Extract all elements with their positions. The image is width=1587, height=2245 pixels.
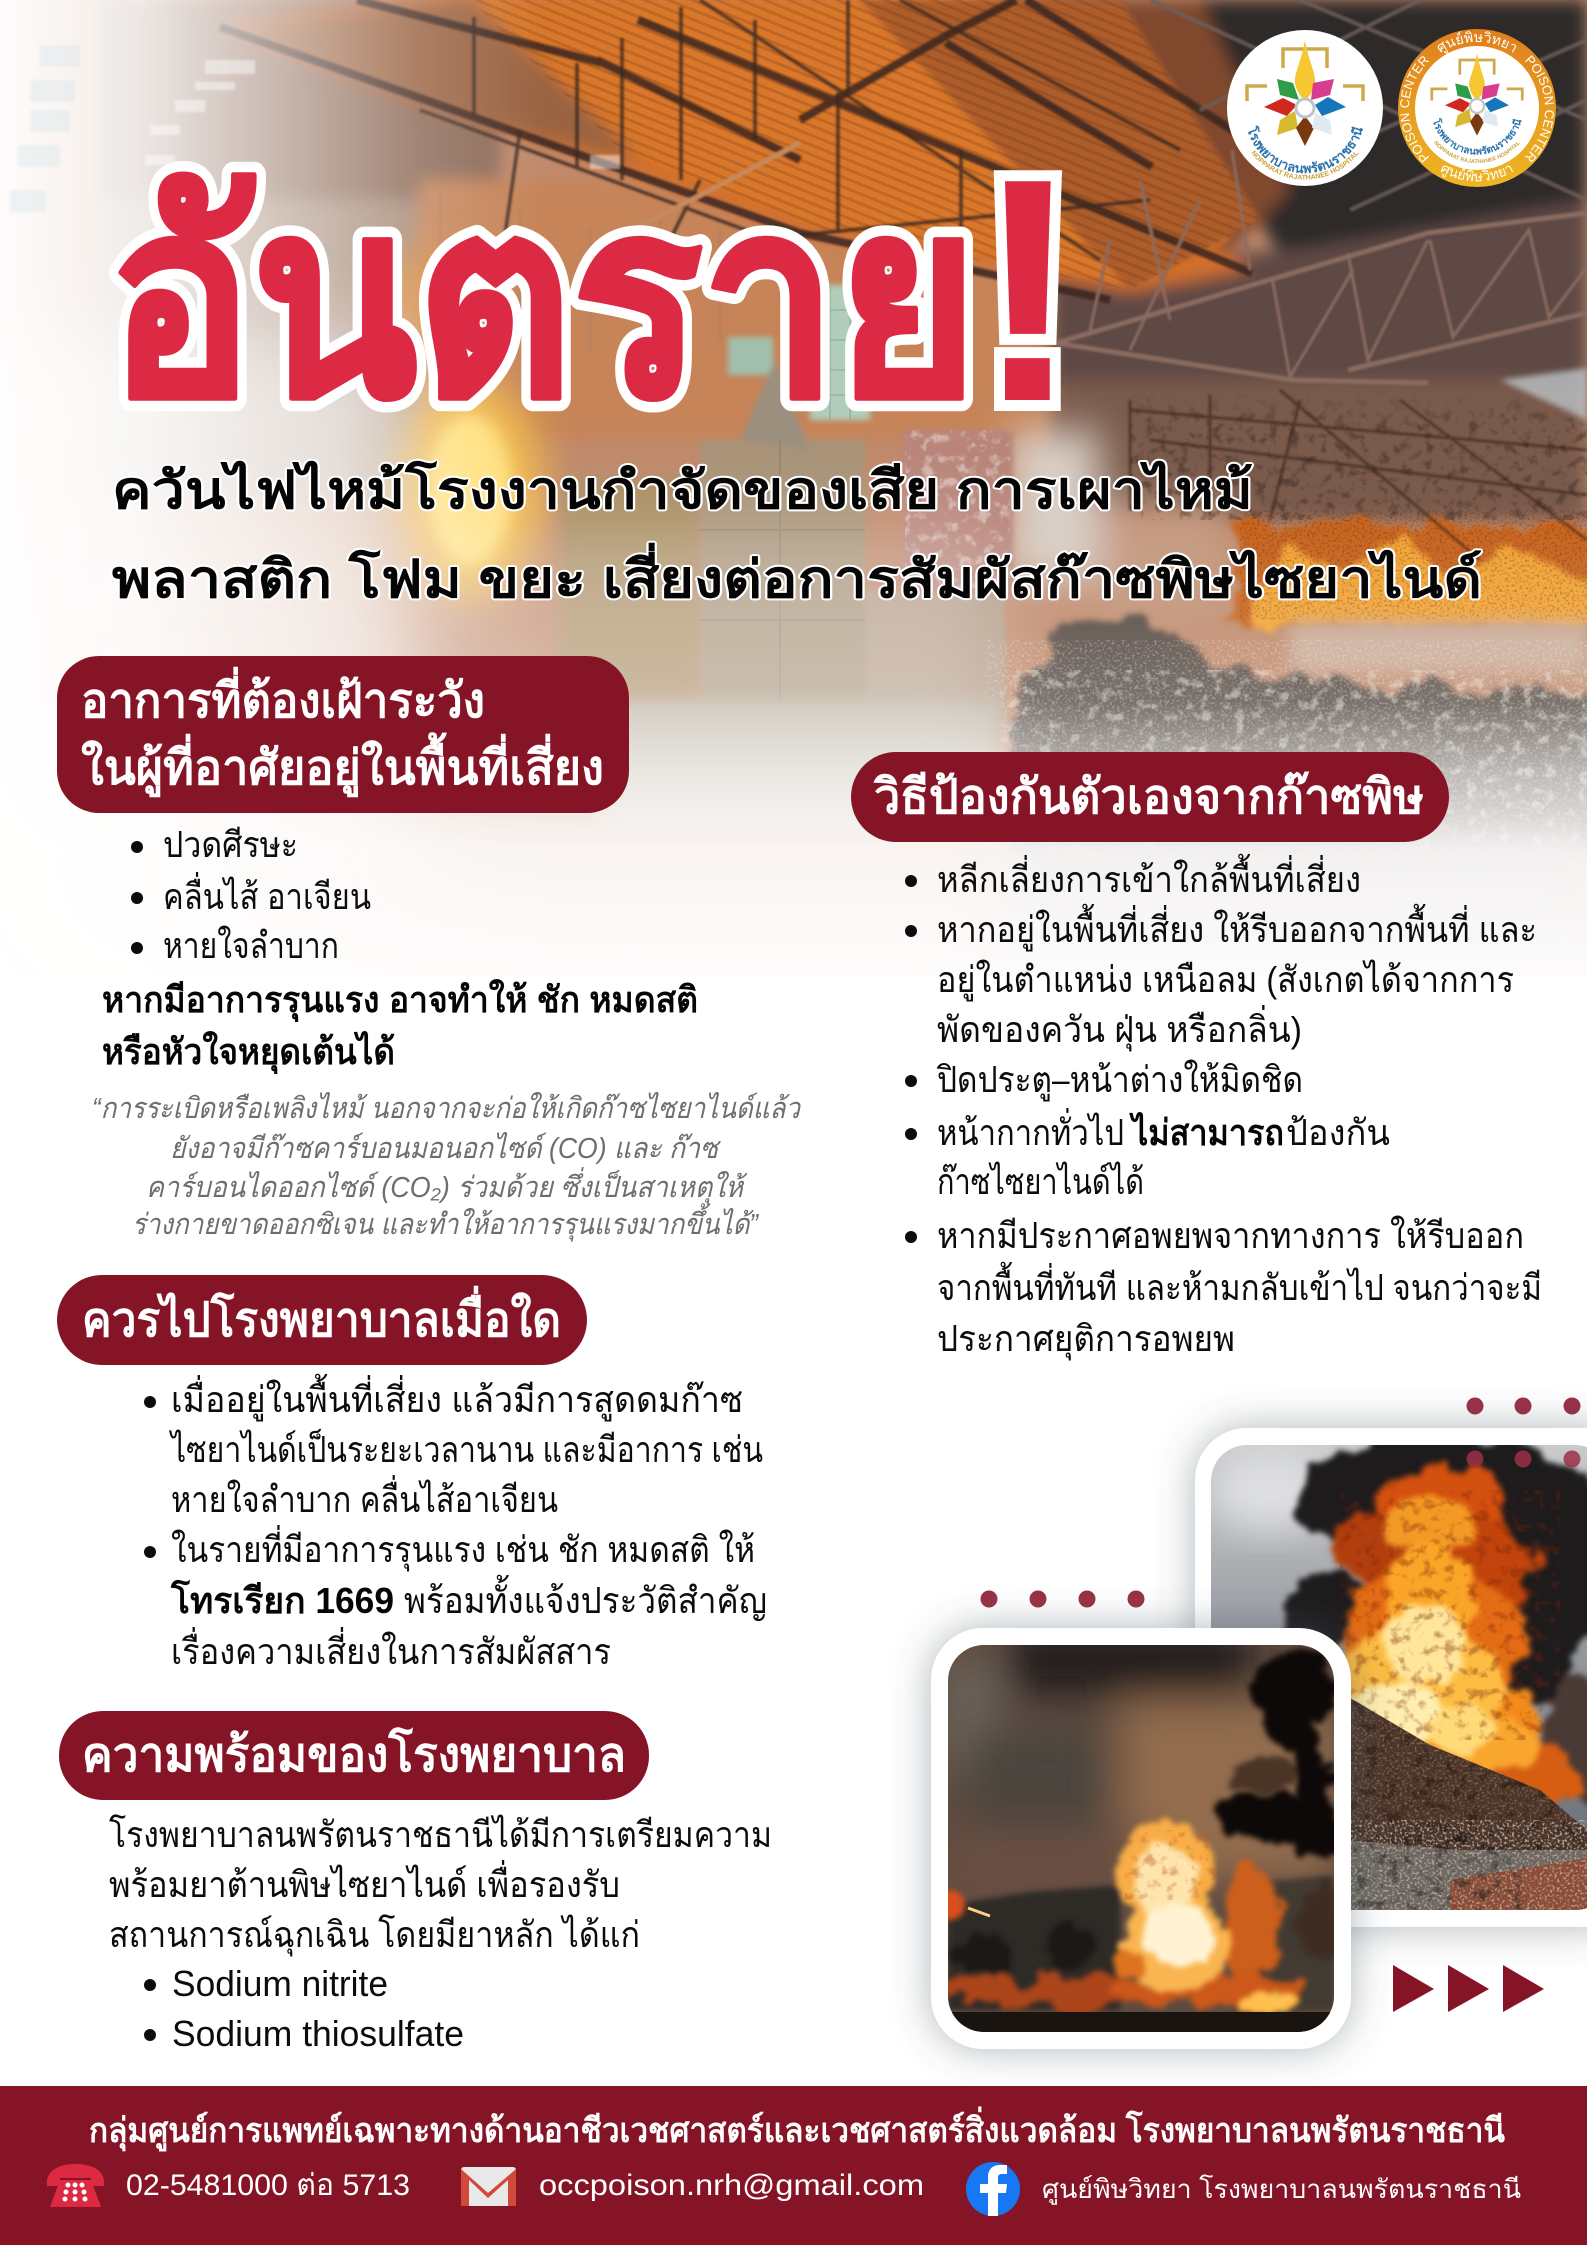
list: when to go: โทรเรียก 1669 — [170, 1579, 394, 1621]
symptom list: หายใจลำบาก — [163, 925, 339, 966]
logo: Poison Center: โรงพยาบาลนพรัตนราชธานี — [1433, 118, 1522, 155]
icon: facebook — [966, 2162, 1020, 2216]
icon: telephone — [47, 2164, 104, 2207]
list: self protection: ก๊าซไซยาไนด์ได้ — [937, 1161, 1144, 1202]
quote: คาร์บอนไดออกไซด์ (CO₂) ร่วมด้วย ซึ่งเป็นสาเหตุให้ — [146, 1167, 748, 1205]
logo: Poison Center: POISON CENTER — [1400, 56, 1430, 163]
list: self protection: ป้องกัน — [1286, 1112, 1390, 1153]
logo: Poison Center: POISON CENTER — [1524, 55, 1554, 162]
subtitle — [112, 459, 1482, 609]
footer heading: กลุ่มศูนย์การแพทย์เฉพาะทางด้านอาชีวเวชศาสตร์และเวชศาสตร์สิ่งแวดล้อม โรงพยาบาลนพรัตนราชธานี — [89, 2106, 1505, 2152]
photo card: burning landfill — [1195, 1428, 1587, 1927]
quote — [92, 1091, 802, 1242]
list: self protection: พัดของควัน ฝุ่น หรือกลิ่น) — [937, 1005, 1302, 1052]
logo: Poison Center: ศูนย์พิษวิทยา — [1440, 166, 1514, 182]
list: when to go: ไซยาไนด์เป็นระยะเวลานาน และมีอาการ เช่น — [168, 1427, 763, 1470]
background photo: burning factory — [0, 0, 1587, 976]
panel: self protection — [851, 752, 1542, 1361]
title: อันตราย — [108, 151, 978, 452]
logo: Nopparat Rajathanee Hospital: NOPPARAT RAJATHANEE HOSPITAL — [1251, 150, 1359, 180]
logo: Poison Center: ศูนย์พิษวิทยา — [1438, 31, 1516, 54]
list: self protection: ปิดประตู–หน้าต่างให้มิดชิด — [936, 1059, 1303, 1102]
panel: when to go to hospital — [57, 1275, 767, 1672]
readiness text: โรงพยาบาลนพรัตนราชธานีได้มีการเตรียมความ — [109, 1814, 772, 1855]
decorative dots: upper — [1466, 1398, 1580, 1414]
roof beams and trusses — [220, 0, 1587, 560]
photo card: explosion — [931, 1625, 1351, 2049]
quote: ร่างกายขาดออกซิเจน และทำให้อาการรุนแรงมากขึ้นได้” — [132, 1203, 759, 1242]
icon: mail — [461, 2167, 516, 2206]
title: ! — [975, 113, 1081, 468]
burning structure at right — [1235, 525, 1587, 620]
symptom list: คลื่นไส้ อาเจียน — [163, 872, 371, 917]
list: self protection: หากอยู่ในพื้นที่เสี่ยง ให้รีบออกจากพื้นที่ และ — [937, 903, 1537, 952]
antidote list: Sodium nitrite — [172, 1963, 388, 2004]
antidote list — [144, 1963, 464, 2054]
heading: symptoms — [57, 656, 629, 813]
list: when to go: เมื่ออยู่ในพื้นที่เสี่ยง แล้วมีการสูดดมก๊าซ — [171, 1373, 743, 1422]
severe symptoms warning: หากมีอาการรุนแรง อาจทำให้ ชัก หมดสติ — [102, 978, 698, 1023]
quote: ยังอาจมีก๊าซคาร์บอนมอนอกไซด์ (CO) และ ก๊าซ — [170, 1131, 721, 1165]
subtitle: ควันไฟไหม้โรงงานกำจัดของเสีย การเผาไหม้ — [112, 459, 1253, 520]
heading: self protection — [851, 752, 1449, 842]
subtitle: พลาสติก โฟม ขยะ เสี่ยงต่อการสัมผัสก๊าซพิษไซยาไนด์ — [112, 543, 1482, 609]
logo: Poison Center: NOPPARAT RAJATHANEE HOSPITAL — [1434, 140, 1520, 164]
list: when to go: พร้อมทั้งแจ้งประวัติสำคัญ — [404, 1574, 767, 1621]
heading: when to go — [57, 1275, 587, 1365]
list: self protection: หน้ากากทั่วไป — [937, 1108, 1124, 1153]
debris pile — [1010, 620, 1587, 860]
footer — [0, 2086, 1587, 2245]
logo: Poison Center — [1398, 29, 1556, 187]
symptom list: ปวดศีรษะ — [163, 824, 298, 865]
icon: arrows — [1393, 1965, 1544, 2012]
quote: “การระเบิดหรือเพลิงไหม้ นอกจากจะก่อให้เกิดก๊าซไซยาไนด์แล้ว — [92, 1091, 802, 1125]
panel: hospital readiness — [59, 1711, 772, 2054]
list: self protection: ไม่สามารถ — [1128, 1111, 1284, 1153]
list: self protection: อยู่ในตำแหน่ง เหนือลม (สังเกตได้จากการ — [937, 959, 1514, 1002]
heading: symptoms: ในผู้ที่อาศัยอยู่ในพื้นที่เสี่ยง — [81, 732, 604, 798]
heading: when to go: ควรไปโรงพยาบาลเมื่อใด — [82, 1285, 561, 1347]
stacked boxes — [560, 285, 1013, 720]
decorative dots: lower — [980, 1590, 1144, 1608]
heading: self protection: วิธีป้องกันตัวเองจากก๊าซพิษ — [873, 771, 1424, 824]
list: self protection — [905, 853, 1542, 1361]
panel: symptoms — [57, 656, 802, 1242]
logo: Nopparat Rajathanee Hospital — [1227, 30, 1383, 186]
readiness text — [109, 1814, 772, 1957]
symptom list — [131, 824, 371, 966]
fire and smoke glow — [380, 245, 1230, 610]
antidote list: Sodium thiosulfate — [172, 2013, 464, 2054]
list: when to go: หายใจลำบาก คลื่นไส้อาเจียน — [171, 1475, 558, 1520]
list: when to go: ในรายที่มีอาการรุนแรง เช่น ชัก หมดสติ ให้ — [171, 1525, 755, 1572]
logo: Nopparat Rajathanee Hospital: โรงพยาบาลนพรัตนราชธานี — [1248, 126, 1363, 174]
white fades — [0, 0, 517, 926]
email: occpoison.nrh@gmail.com — [539, 2169, 924, 2202]
list: when to go: เรื่องความเสี่ยงในการสัมผัสสาร — [171, 1627, 611, 1672]
severe symptoms warning: หรือหัวใจหยุดเต้นได้ — [102, 1030, 395, 1075]
heading: readiness — [59, 1711, 649, 1800]
list: self protection: หากมีประกาศอพยพจากทางการ ให้รีบออก — [937, 1215, 1524, 1256]
list: self protection: ประกาศยุติการอพยพ — [937, 1318, 1235, 1361]
list: self protection: หลีกเลี่ยงการเข้าใกล้พื้นที่เสี่ยง — [937, 853, 1361, 900]
severe symptoms warning — [102, 978, 698, 1075]
facebook page name: ศูนย์พิษวิทยา โรงพยาบาลนพรัตนราชธานี — [1042, 2174, 1521, 2205]
readiness text: สถานการณ์ฉุกเฉิน โดยมียาหลัก ได้แก่ — [109, 1914, 640, 1957]
readiness text: พร้อมยาต้านพิษไซยาไนด์ เพื่อรองรับ — [109, 1860, 620, 1905]
list: when to go — [144, 1373, 767, 1672]
heading: readiness: ความพร้อมของโรงพยาบาล — [82, 1726, 626, 1782]
phone number: 02-5481000 ต่อ 5713 — [126, 2169, 410, 2202]
heading: symptoms: อาการที่ต้องเฝ้าระวัง — [81, 666, 485, 728]
title: อันตราย — [108, 151, 978, 452]
